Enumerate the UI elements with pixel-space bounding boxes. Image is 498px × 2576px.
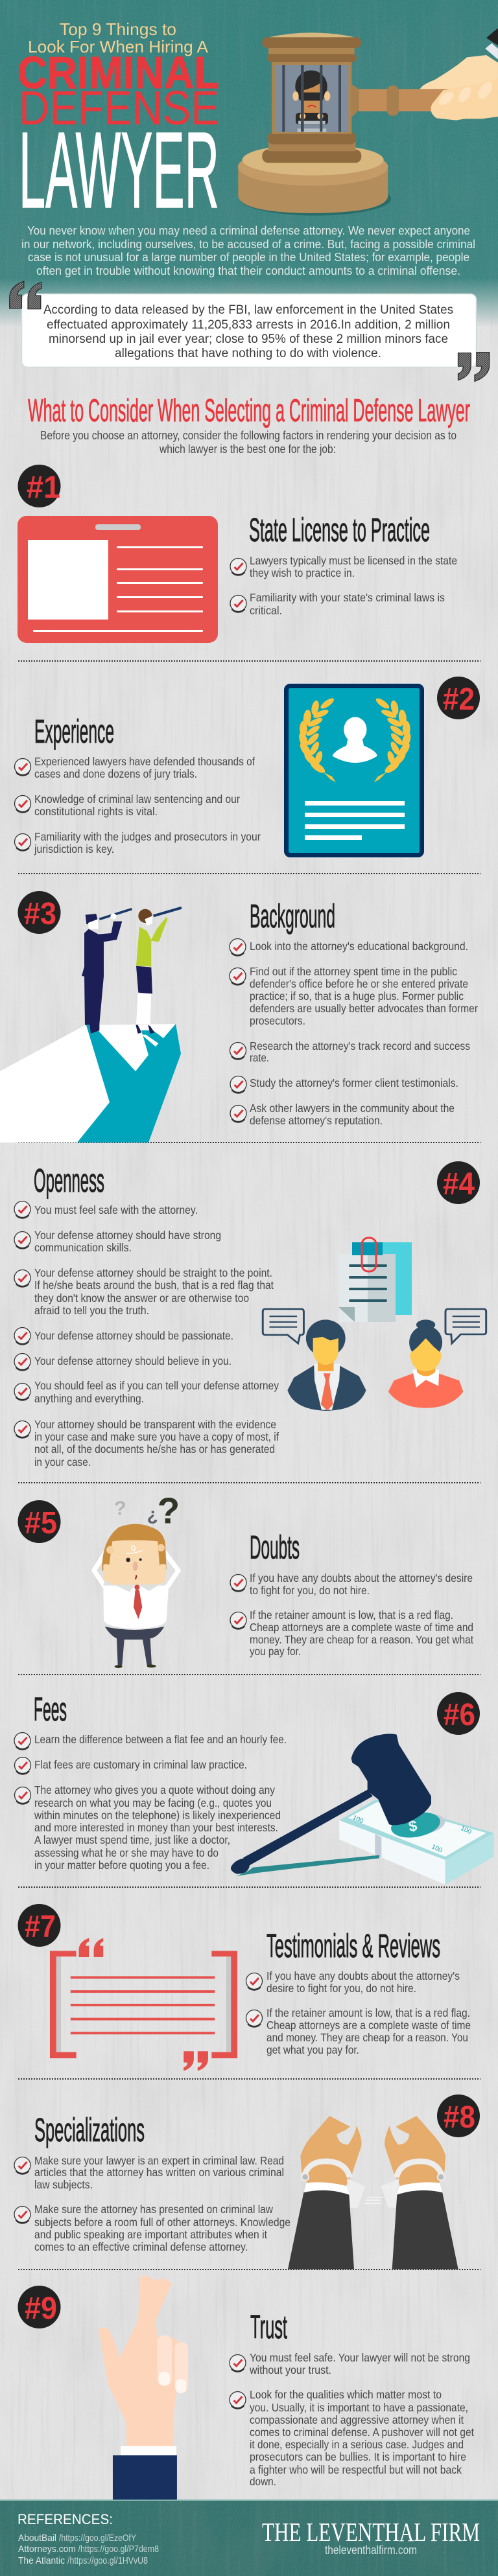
bullet — [14, 830, 261, 855]
bullet: and more interested in money than your best interests. — [34, 1821, 278, 1834]
bullet: You must feel safe with the attorney. — [34, 1203, 198, 1216]
badge 2 — [437, 677, 480, 719]
bullet: without your trust. — [249, 2363, 331, 2376]
left hand — [288, 2116, 365, 2269]
bullet — [230, 554, 457, 579]
section intro text: which lawyer is the best one for the job: — [159, 443, 336, 456]
intro paragraph: often get in trouble without knowing that their conduct amounts to a criminal offense. — [36, 264, 460, 277]
bullet: and money. They are cheap for a reason. You — [267, 2031, 468, 2044]
bullet: anything and everything. — [34, 1392, 144, 1405]
illustration: gavel on stack of money — [231, 1734, 494, 1885]
badge 5 — [18, 1500, 61, 1543]
bullet: comes to an effective criminal defense attorney. — [34, 2240, 248, 2253]
bullet — [14, 1229, 221, 1254]
bullet — [230, 591, 445, 617]
bullet: they don't know the answer or are otherwise too — [34, 1292, 249, 1305]
icon: red id card — [18, 516, 218, 643]
bullet: Your defense attorney should believe in you. — [34, 1354, 231, 1367]
bullet: Experienced lawyers have defended thousands of — [34, 755, 255, 768]
badge 3: #3 — [24, 897, 56, 931]
illustration: hand with crossed fingers — [99, 2276, 188, 2500]
bullet — [230, 1102, 455, 1127]
bullet: cases and done dozens of jury trials. — [34, 767, 197, 780]
reference list: /https://goo.gl/1HVvU8 — [67, 2556, 148, 2566]
badge 8 — [437, 2094, 480, 2137]
bullet: A lawyer must spend time, just like a doctor, — [34, 1833, 230, 1846]
laurel left — [298, 697, 336, 782]
reference list: /https://goo.gl/EzeOfY — [59, 2533, 136, 2544]
panel 6: fees: Fees — [34, 1691, 67, 1728]
quote box: minorsend up in jail ever year; close to 95% of these 2 million minors face — [49, 332, 448, 346]
bullet: in your case. — [34, 1456, 91, 1468]
bullet: If he/she beats around the bush, that is a red flag that — [34, 1279, 274, 1292]
panel 3: background — [0, 891, 478, 1143]
intro paragraph: case is not unusual for a large number of people in the United States; for example, people — [28, 250, 469, 264]
panel 6: fees — [14, 1691, 494, 1885]
bullet: articles that the attorney has written on various criminal — [34, 2166, 284, 2179]
panel 3: background: Background — [250, 898, 335, 934]
badge 1: #1 — [27, 470, 60, 505]
reference list — [18, 2533, 159, 2566]
panel 5: doubts: Doubts — [250, 1529, 300, 1566]
icon: opening quotation marks — [10, 281, 42, 309]
bullet — [230, 1572, 473, 1597]
bullet: Make sure your lawyer is an expert in criminal law. Read — [34, 2154, 284, 2167]
bullet — [14, 755, 255, 780]
icon: red quote frame — [50, 1938, 237, 2071]
bullet: rate. — [250, 1051, 269, 1064]
bullet: If you have any doubts about the attorney's desire — [250, 1572, 473, 1584]
bullet: a fighter who will be respectful but will not back — [250, 2463, 462, 2476]
badge 6: #6 — [444, 1698, 475, 1732]
icon: closing quotation marks — [458, 353, 490, 381]
illustration: confused man: ? — [158, 1491, 180, 1532]
right hand — [381, 2116, 458, 2269]
bullet: defense attorney's reputation. — [250, 1114, 383, 1127]
bullet — [14, 1733, 287, 1750]
bullet: it done, especially in a serious case. Judges and — [250, 2438, 464, 2451]
reference list: AboutBail — [18, 2533, 56, 2544]
bullet — [14, 2154, 284, 2191]
bullet: Your defense attorney should have strong — [34, 1229, 221, 1242]
bullet: Familiarity with the judges and prosecutors in your — [34, 830, 261, 843]
bullet: Research the attorney's track record and success — [250, 1039, 470, 1052]
bullet — [230, 1039, 470, 1064]
prisoner — [292, 71, 330, 132]
bullet — [230, 938, 468, 956]
panel 2: experience: Experience — [34, 713, 114, 750]
bullet — [14, 1758, 247, 1774]
bullet — [14, 1201, 198, 1218]
bullet: Your attorney should be transparent with the evidence — [34, 1418, 276, 1431]
badge 8: #8 — [444, 2100, 475, 2135]
bullet: law subjects. — [34, 2178, 93, 2191]
title: CRIMINAL — [18, 47, 219, 98]
illustration: confused man: ¿ — [147, 1504, 158, 1524]
panel 4: openness: Openness — [34, 1162, 104, 1199]
bullet — [14, 1266, 274, 1317]
bullet: comes to criminal defense. A pushover will not get — [250, 2426, 474, 2439]
illustration: cliff with two figures using telescopes — [0, 908, 182, 1143]
bullet: communication skills. — [34, 1241, 132, 1254]
bullet: prosecutors can be bullies. It is important to hire — [250, 2450, 466, 2463]
panel 5: doubts — [18, 1491, 473, 1668]
bullet: Cheap attorneys are a complete waste of time and — [250, 1621, 473, 1634]
section intro text — [40, 429, 456, 456]
reference list: /https://goo.gl/P7dem8 — [78, 2544, 159, 2555]
panel 9: trust: Trust — [250, 2308, 287, 2345]
panel 2: experience — [14, 677, 480, 855]
title — [18, 19, 219, 231]
bullet: Knowledge of criminal law sentencing and our — [34, 793, 240, 806]
illustration: clipboard — [338, 1238, 412, 1322]
bullet — [14, 1418, 279, 1468]
bullet: compassionate and aggressive attorney when it — [250, 2413, 464, 2426]
badge 2: #2 — [443, 682, 475, 717]
illustration: handcuffed hands — [288, 2116, 458, 2269]
quote box: allegations that have nothing to do with violence. — [115, 346, 381, 360]
bullet: You should feel as if you can tell your defense attorney — [34, 1379, 279, 1392]
bullet: Look for the qualities which matter most to — [250, 2388, 442, 2401]
bullet: not all, of the documents he/she has or has generated — [34, 1443, 275, 1456]
divider lines — [18, 661, 480, 2269]
badge 9: #9 — [25, 2292, 57, 2326]
bullet: subjects before a room full of other attorneys. Knowledge — [34, 2216, 290, 2229]
bullet: defender's office before he or she entered private — [250, 977, 468, 990]
panel 8: specializations: Specializations — [34, 2111, 145, 2148]
bullet: Look into the attorney's educational background. — [250, 940, 468, 953]
bullet: practice; if so, that is a huge plus. Former public — [250, 990, 464, 1003]
panel 7: testimonials — [18, 1904, 471, 2071]
quote box: effectuated approximately 11,205,833 arrests in 2016.In addition, 2 million — [47, 318, 450, 332]
bullet: Study the attorney's former client testimonials. — [250, 1076, 458, 1089]
badge 4: #4 — [443, 1167, 475, 1201]
intro paragraph: You never know when you may need a criminal defense attorney. We never expect anyone — [27, 224, 470, 237]
illustration: confused man — [94, 1491, 180, 1668]
panel 9: trust — [18, 2276, 474, 2500]
quote box — [22, 294, 476, 367]
bullet — [230, 2351, 470, 2376]
illustration: gavel on stack of money: 100 — [351, 1814, 364, 1826]
bullet: you. Usually, it is important to have a passionate, — [250, 2401, 468, 2414]
bullet — [14, 2203, 290, 2253]
badge 1 — [18, 465, 61, 507]
bullet: in your matter before quoting you a fee. — [34, 1859, 209, 1872]
bullet: Ask other lawyers in the community about the — [250, 1102, 455, 1115]
illustration: gavel on stack of money: 100 — [460, 1825, 473, 1836]
bullet — [246, 1969, 460, 1995]
bullet: Make sure the attorney has presented on criminal law — [34, 2203, 273, 2216]
title: DEFENSE — [19, 81, 219, 135]
badge 6 — [437, 1692, 480, 1735]
bullet — [230, 2388, 474, 2488]
bullet: prosecutors. — [250, 1014, 305, 1027]
bullet: in your case and make sure you have a copy of most, if — [34, 1430, 279, 1443]
bullet: The attorney who gives you a quote without doing any — [34, 1783, 275, 1796]
references heading: REFERENCES: — [18, 2511, 113, 2527]
bullet: money. They are cheap for a reason. You get what — [250, 1633, 473, 1646]
badge 7: #7 — [25, 1910, 56, 1944]
bullet — [14, 1783, 281, 1872]
panel 1: state license — [18, 465, 457, 643]
person silhouette — [333, 717, 377, 763]
bullet — [230, 1608, 473, 1658]
bullet: Learn the difference between a flat fee and an hourly fee. — [34, 1733, 287, 1746]
bullet — [230, 965, 478, 1027]
reference list: The Atlantic — [18, 2556, 65, 2566]
bullet: If the retainer amount is low, that is a red flag. — [250, 1608, 453, 1621]
reference list: Attorneys.com — [18, 2544, 76, 2555]
bullet: assessing what he or she may have to do — [34, 1846, 219, 1859]
panel 4: openness — [14, 1161, 486, 1468]
intro paragraph — [21, 224, 475, 277]
bullet: they wish to practice in. — [250, 566, 355, 579]
bullet: and public speaking are important attributes when it — [34, 2228, 267, 2241]
illustration: gavel on stack of money: $ — [407, 1817, 418, 1835]
title: Top 9 Things to — [60, 19, 176, 39]
bullet: If the retainer amount is low, that is a red flag. — [267, 2006, 470, 2019]
bullet: down. — [250, 2475, 276, 2488]
illustration: confused man: ? — [114, 1497, 126, 1519]
bullet: within minutes on the telephone) is likely inexperienced — [34, 1809, 281, 1822]
bullet: Cheap attorneys are a complete waste of time — [267, 2019, 471, 2032]
bullet: get what you pay for. — [267, 2043, 359, 2056]
bullet: research on what you may be facing (e.g., quotes you — [34, 1796, 272, 1809]
bullet — [14, 1353, 231, 1371]
illustration: man and woman with speech bubbles — [263, 1309, 486, 1411]
bullet — [14, 1327, 233, 1345]
bullet: Flat fees are customary in criminal law practice. — [34, 1758, 247, 1771]
badge 5: #5 — [25, 1506, 57, 1540]
bullet: You must feel safe. Your lawyer will not be strong — [250, 2351, 470, 2364]
text: LAWYER — [19, 110, 219, 231]
bullet: Familiarity with your state's criminal laws is — [250, 591, 445, 604]
title: Look For When Hiring A — [28, 37, 209, 56]
bullet: afraid to tell you the truth. — [34, 1304, 149, 1317]
bullet: you pay for. — [250, 1645, 301, 1658]
firm logo: theleventhalfirm.com — [325, 2544, 417, 2557]
badge 7 — [18, 1904, 61, 1947]
bullet: Your defense attorney should be passionate. — [34, 1329, 233, 1342]
bullet: jurisdiction is key. — [34, 842, 114, 855]
badge 3 — [18, 891, 61, 934]
bullet — [230, 1076, 458, 1093]
bullet: If you have any doubts about the attorney's — [267, 1969, 460, 1982]
bullet: to fight for you, do not hire. — [250, 1584, 370, 1597]
badge 9 — [18, 2286, 61, 2328]
bullet — [246, 2006, 471, 2056]
bullet: desire to fight for you, do not hire. — [267, 1982, 416, 1995]
bullet: critical. — [250, 604, 282, 617]
intro paragraph: in our network, including ourselves, to be accused of a crime. But, facing a possible criminal — [21, 237, 475, 251]
bullet — [14, 1379, 279, 1405]
icon: certificate with laurel — [287, 686, 421, 855]
illustration: gavel on stack of money: 100 — [431, 1843, 444, 1855]
panel 8: specializations — [14, 2094, 480, 2269]
quote box: According to data released by the FBI, law enforcement in the United States — [43, 303, 453, 317]
bullet: Find out if the attorney spent time in the public — [250, 965, 457, 978]
laurel right — [374, 697, 412, 782]
bullet — [14, 793, 240, 818]
footer — [0, 2500, 498, 2566]
bullet: constitutional rights is vital. — [34, 805, 158, 818]
bullet: Your defense attorney should be straight to the point. — [34, 1266, 272, 1279]
illustration: gavel with prisoner behind bars held by a hand — [238, 28, 498, 216]
badge 4 — [437, 1161, 480, 1204]
bullet: Lawyers typically must be licensed in the state — [250, 554, 457, 567]
